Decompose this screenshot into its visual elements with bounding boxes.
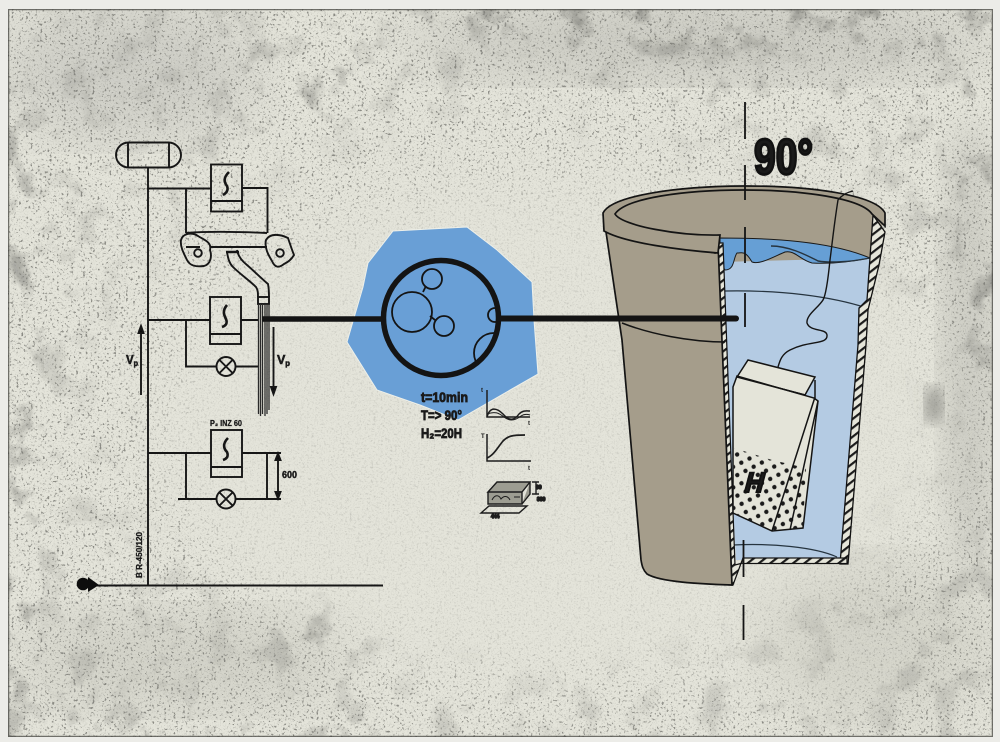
label: V right: V	[277, 352, 286, 367]
icon: container box	[481, 482, 546, 520]
icon: container box: 90	[536, 485, 542, 491]
chart: step graph: t	[528, 466, 530, 472]
bottom hatched wall	[743, 558, 847, 564]
label: pipe code: B R-450/120	[135, 531, 144, 578]
panel: blue polygon	[347, 227, 538, 420]
cup front body	[606, 232, 732, 585]
heater unit 3	[148, 430, 281, 499]
cup inner back wall	[603, 186, 885, 262]
text block: parameters: T=> 90°	[421, 408, 462, 423]
icon: lamp 1	[216, 357, 236, 376]
icon: container box: 300	[537, 497, 546, 503]
tea water lines	[725, 246, 870, 557]
chart: wave graph: t	[528, 421, 530, 427]
water stream	[258, 304, 269, 416]
cup rim	[603, 186, 885, 253]
text block: parameters	[421, 390, 468, 441]
dimension arrow	[276, 454, 280, 498]
chart: step graph	[481, 434, 531, 472]
label: heater code: P₂ INZ 60	[210, 418, 242, 428]
icon: lamp 2	[216, 490, 236, 508]
label: V left: V	[126, 352, 135, 367]
heater unit 1	[148, 164, 268, 233]
chart: wave graph: t	[481, 388, 483, 394]
icon: tank	[116, 142, 181, 168]
panel: circuit diagram	[77, 142, 383, 592]
cup lower band line	[622, 323, 725, 342]
icon: faucet	[181, 232, 294, 304]
right hatched wall	[840, 215, 885, 564]
connector: thick line from ring to cup	[499, 316, 736, 322]
text block: parameters: t=10min	[421, 390, 468, 405]
icon: ring with bubbles	[384, 260, 514, 376]
tea bag string	[778, 191, 853, 367]
text block: parameters: H₂=20H	[421, 426, 462, 441]
chart: step graph: T	[481, 434, 485, 440]
icon: container box: 444	[491, 514, 500, 520]
label: V left: p	[134, 359, 138, 368]
tea surface	[720, 238, 870, 270]
baseline pipe	[89, 584, 383, 586]
heading: 90 degrees: 90°	[754, 129, 813, 185]
label: V right: p	[285, 359, 290, 368]
label: bag letter: H	[741, 467, 769, 499]
chart: wave graph	[481, 388, 530, 427]
connector: thick line from stream to ring	[262, 316, 383, 322]
left hatched wall	[717, 243, 743, 585]
main vertical pipe	[147, 168, 149, 585]
icon: pipe start bullet	[77, 577, 99, 592]
arrow: V down	[271, 327, 276, 394]
center axis dashes	[744, 102, 745, 640]
panel: cup cutaway	[603, 102, 885, 640]
label: dimension 600: 600	[282, 470, 297, 481]
heater unit 2	[148, 297, 258, 366]
arrow: V up	[138, 326, 144, 395]
tea liquid	[720, 258, 871, 560]
tea bag	[733, 360, 818, 531]
